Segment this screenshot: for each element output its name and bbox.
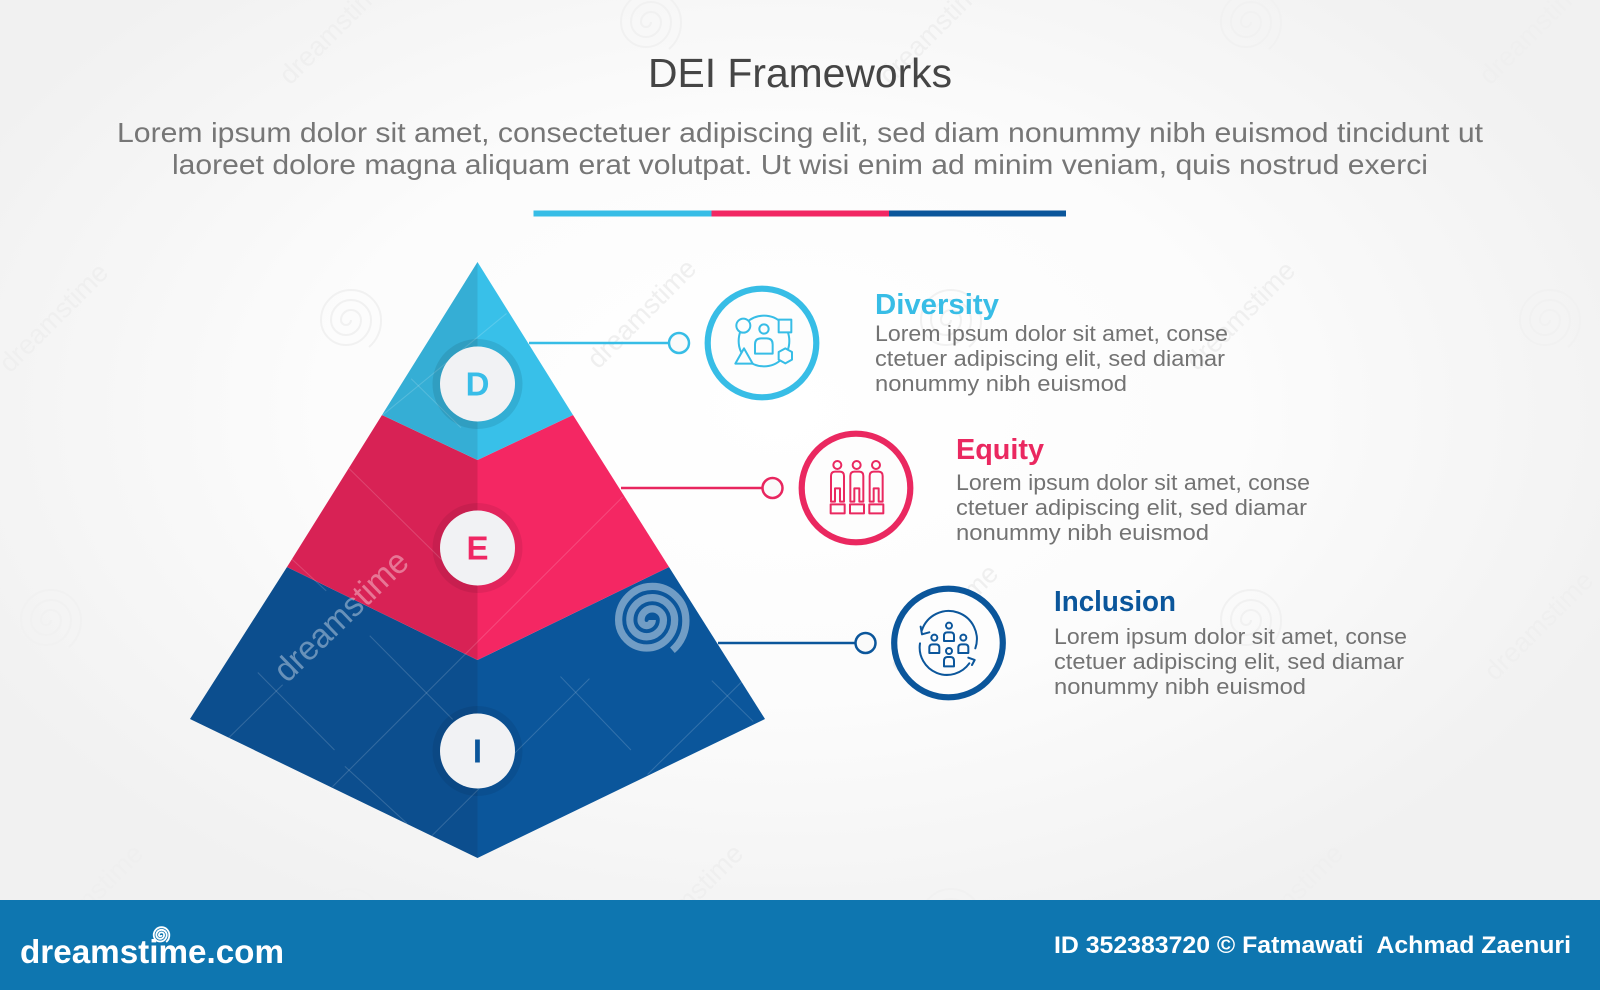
footer band	[0, 900, 1600, 990]
text block: equity: Lorem ipsum dolor sit amet, conse	[956, 470, 1310, 495]
watermark pattern: dreamstime	[581, 253, 702, 374]
pyramid layer: inclusion	[190, 567, 765, 858]
connector: diversity	[529, 333, 689, 353]
pyramid layer: diversity	[382, 262, 573, 460]
watermark pattern: dreamstime	[1180, 255, 1301, 376]
watermark pattern: dreamstime	[28, 838, 149, 959]
text block: diversity: ctetuer adipiscing elit, sed diamar	[875, 346, 1225, 371]
icon: equity	[802, 434, 910, 542]
text block: inclusion: Inclusion	[1054, 586, 1176, 618]
text block: inclusion: Lorem ipsum dolor sit amet, conse	[1054, 624, 1407, 649]
subtitle text: Lorem ipsum dolor sit amet, consectetuer adipiscing elit, sed diam nonummy nibh euismod tincidunt ut	[117, 117, 1483, 148]
pyramid layer: equity	[287, 415, 669, 660]
text block: equity: Equity	[956, 434, 1044, 466]
subtitle text	[117, 117, 1483, 180]
footer logo: dreamstime.com	[20, 933, 284, 970]
pyramid watermark lines	[229, 313, 753, 836]
badge: I	[432, 706, 522, 796]
pyramid watermark text: dreamstime	[266, 543, 416, 689]
badge: E	[432, 503, 522, 593]
watermark pattern: dreamstime	[1478, 565, 1599, 686]
icon: inclusion	[894, 589, 1003, 697]
connector: inclusion	[718, 633, 876, 653]
badge: D: D	[466, 366, 489, 402]
pyramid watermark spiral	[619, 586, 686, 650]
title: DEI Frameworks	[648, 50, 952, 96]
icon: diversity	[708, 289, 816, 397]
pyramid	[190, 262, 765, 858]
text block: diversity: Lorem ipsum dolor sit amet, conse	[875, 321, 1228, 346]
text block: equity	[956, 434, 1310, 545]
watermark pattern: dreamstime	[883, 558, 1004, 679]
watermark pattern: dreamstime	[1228, 838, 1349, 959]
text block: diversity: nonummy nibh euismod	[875, 371, 1127, 396]
text block: diversity: Diversity	[875, 289, 999, 321]
footer credit: ID 352383720 © Fatmawati Achmad Zaenuri	[1054, 932, 1571, 959]
connector lines	[529, 333, 876, 653]
badge: D	[432, 339, 522, 429]
connector: equity	[621, 478, 782, 498]
text block: inclusion: ctetuer adipiscing elit, sed diamar	[1054, 649, 1404, 674]
text block: equity: ctetuer adipiscing elit, sed diamar	[956, 495, 1307, 520]
text block: equity: nonummy nibh euismod	[956, 520, 1209, 545]
subtitle text: laoreet dolore magna aliquam erat volutpat. Ut wisi enim ad minim veniam, quis nostrud exerci	[172, 149, 1428, 180]
text block: inclusion: nonummy nibh euismod	[1054, 674, 1306, 699]
text block: inclusion	[1054, 586, 1407, 699]
watermark pattern: dreamstime	[628, 838, 749, 959]
text block: diversity	[875, 289, 1228, 396]
tricolor divider	[534, 210, 1066, 216]
badge: I: I	[473, 732, 482, 770]
badge: E: E	[466, 530, 489, 566]
